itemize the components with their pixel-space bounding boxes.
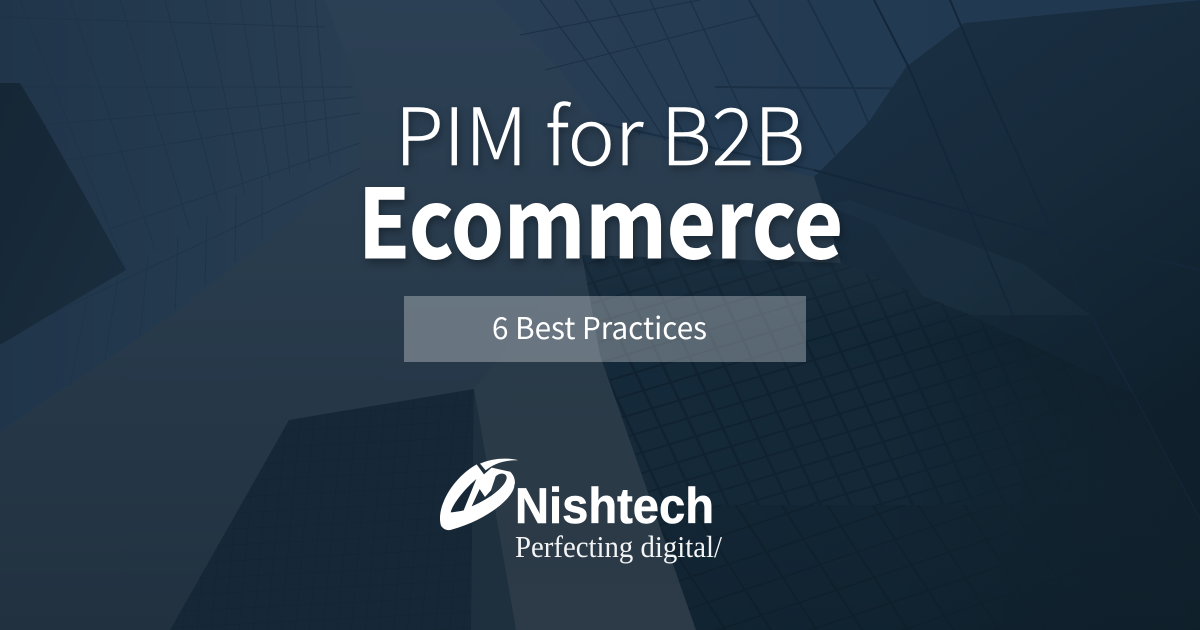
title: PIM for B2B: PIM for B2B — [395, 73, 805, 188]
subtitle text: 6 Best Practices — [492, 304, 707, 348]
building: dark reflection on the right — [814, 0, 1200, 630]
logo tagline: Perfecting digital/ — [515, 529, 722, 564]
title: Ecommerce: Ecommerce — [358, 149, 843, 286]
building: lower centre tower — [170, 389, 516, 630]
building: right tower with window grid — [560, 240, 1200, 630]
logo icon: swoosh N — [440, 459, 518, 530]
building: dark left corner — [0, 83, 126, 345]
logo wordmark: Nishtech — [515, 478, 714, 534]
logo: Nishtech — [440, 459, 722, 564]
building: pale central wall — [474, 255, 696, 630]
subtitle box — [404, 296, 806, 362]
building: top blue glass tower — [494, 0, 1200, 177]
building: top left facade — [0, 0, 363, 432]
